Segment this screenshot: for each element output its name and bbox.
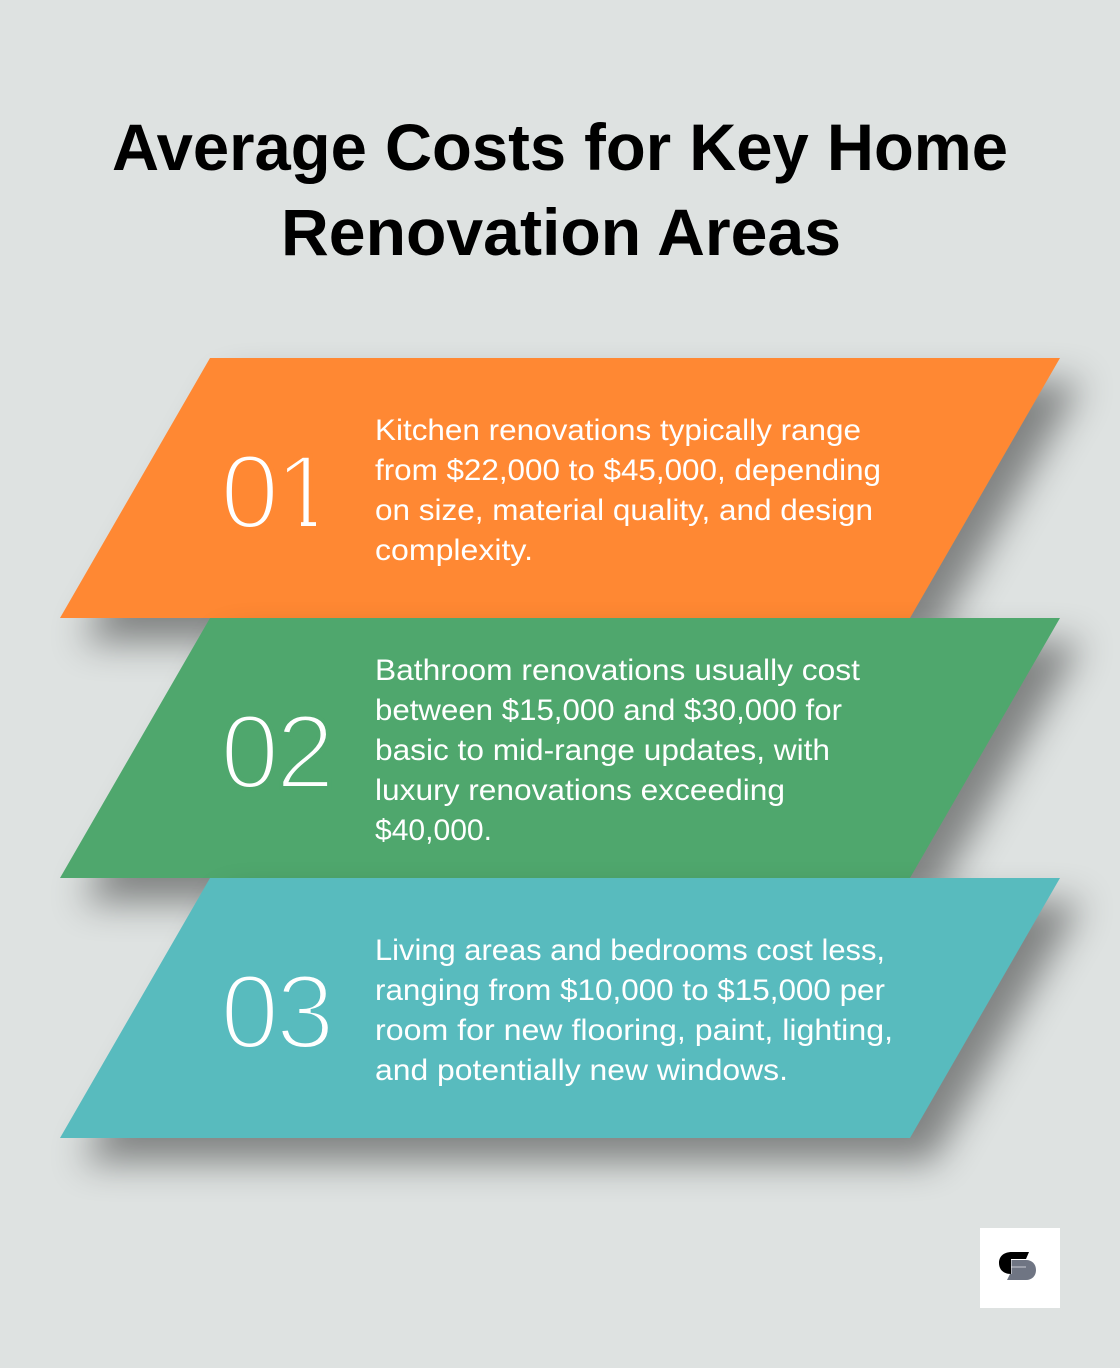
title: Renovation Areas [281,195,841,269]
living areas text: ranging from $10,000 to $15,000 per [375,974,885,1007]
number 01: 01 [220,434,333,551]
panel: kitchen costs [60,358,1060,618]
kitchen text: on size, material quality, and design [375,494,873,527]
bathroom text: luxury renovations exceeding [375,774,785,807]
panel: bathroom costs [60,618,1060,878]
number 02: 02 [220,694,334,811]
bathroom text: $40,000. [375,814,492,847]
bathroom text: between $15,000 and $30,000 for [375,694,842,727]
kitchen text: Kitchen renovations typically range [375,414,861,447]
teal parallelogram [60,878,1060,1138]
panel: living areas and bedrooms costs [60,878,1060,1138]
orange parallelogram [60,358,1060,618]
kitchen text [375,414,881,567]
number 03: 03 [220,954,334,1071]
bathroom text: Bathroom renovations usually cost [375,654,861,687]
bathroom text: basic to mid-range updates, with [375,734,830,767]
living areas text: and potentially new windows. [375,1054,788,1087]
green parallelogram [60,618,1060,878]
bathroom text [375,654,861,847]
title: Average Costs for Key Home [112,110,1008,184]
living areas text: Living areas and bedrooms cost less, [375,934,885,967]
icon: logo badge [980,1228,1060,1308]
living areas text: room for new flooring, paint, lighting, [375,1014,893,1047]
living areas text [375,934,893,1087]
kitchen text: complexity. [375,534,533,567]
kitchen text: from $22,000 to $45,000, depending [375,454,881,487]
title [112,110,1008,269]
